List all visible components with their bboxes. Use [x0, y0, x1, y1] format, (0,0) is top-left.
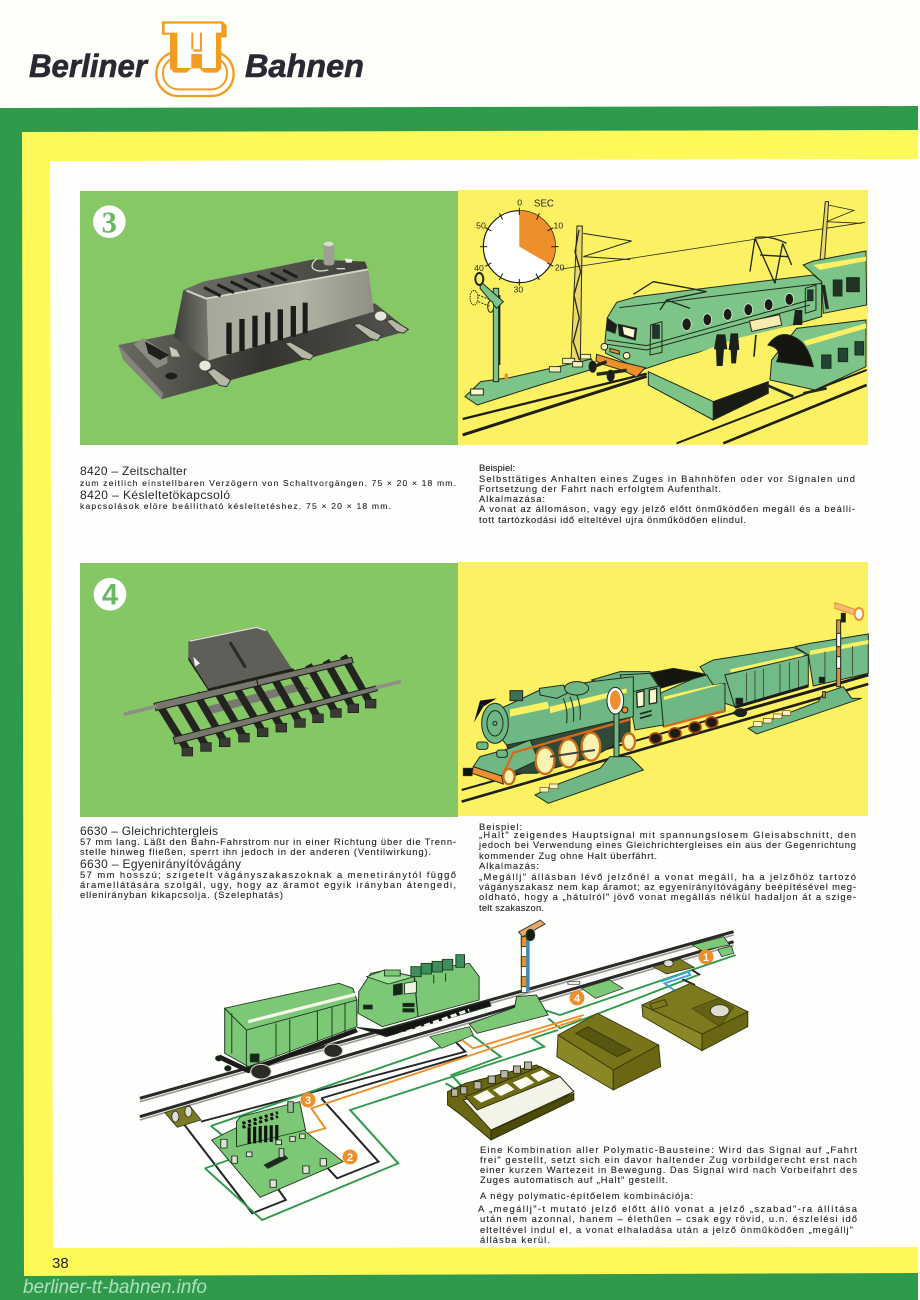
wiring [183, 955, 736, 1220]
caption: 6630 rectifier track: áramellátására szolgál, ugy, hogy az áramot egyik irányban átengedi, [80, 879, 456, 890]
text block: Polymatic combination [478, 1144, 858, 1245]
near signal with disc [535, 687, 643, 803]
text block: example 3: A vonat az állomáson, vagy egy jelző előtt önműködően megáll és a beálli- [479, 503, 855, 514]
panel: steam train illustration [458, 562, 868, 816]
caption: 6630 rectifier track: 57 mm lang. Läßt den Bahn-Fahrstrom nur in einer Richtung über die Trenn- [80, 836, 456, 847]
signal with base [465, 273, 593, 405]
text block: example 4: kommender Zug ohne Halt überfährt. [479, 850, 657, 861]
header logo [29, 21, 364, 96]
caption: 8420 time switch: 8420 – Zeitschalter [80, 464, 187, 478]
timer dial: 30 [514, 284, 523, 294]
text block: example 3: Alkalmazása: [479, 493, 545, 504]
text block: Polymatic combination: A „megállj"-t mutató jelző előtt álló vonat a jelző „szabad"-ra állítása [478, 1203, 858, 1214]
text block: example 4: vágányszakasz nem kap áramot; az egyenirányítóvágány beépítésével meg- [479, 881, 856, 892]
icon: TT emblem [156, 21, 234, 96]
text block: Polymatic combination: frei" gestellt, setzt sich ein davor haltender Zug vorbildgerecht erst nach [480, 1154, 857, 1165]
logo wordmark right: Bahnen [245, 48, 364, 84]
badges: numbered modules: 2 [347, 1152, 353, 1164]
text block: Polymatic combination: állásba kerül. [480, 1234, 550, 1245]
text block: Polymatic combination: Zuges automatisch auf „Halt" gestellt. [480, 1174, 668, 1185]
tank locomotive [357, 955, 491, 1037]
text block: example 4: „Halt" zeigendes Hauptsignal mit spannungslosem Gleisabschnitt, den [479, 829, 856, 840]
text block: Polymatic combination: Eine Kombination aller Polymatic-Bausteine: Wird das Signal auf „Fahrt [480, 1144, 857, 1155]
text block: Polymatic combination: A négy polymatic-építőelem kombinációja: [480, 1190, 693, 1201]
badges: numbered modules: 3 [305, 1095, 311, 1107]
catenary masts and wire [562, 202, 865, 362]
timer dial: SEC [534, 198, 554, 209]
right signal [748, 603, 863, 734]
pantographs [633, 237, 792, 310]
badge: number 4: 4 [102, 579, 119, 612]
text block: example 3: tott tartózkodási idő elteltével ujra önműködően elindul. [479, 514, 746, 525]
caption: 6630 rectifier track: stelle hinweg fließen, sperrt ihn jedoch in der anderen (Ventilwirkung). [80, 846, 431, 857]
timer dial: 10 [554, 220, 563, 230]
panel: product 4 green photo [80, 563, 458, 817]
text block: example 4: Beispiel: [479, 821, 522, 832]
timer dial: 40 [474, 263, 484, 273]
track contacts [165, 937, 734, 1127]
text block: example 4: telt szakaszon. [479, 902, 544, 913]
caption: 6630 rectifier track: 6630 – Egyenirányítóvágány [80, 857, 241, 871]
diagram: complete Polymatic layout [140, 920, 748, 1220]
platform [648, 325, 793, 420]
panel: electric train illustration with timer [458, 190, 868, 445]
transformer box [642, 983, 748, 1051]
timer dial: 0 [517, 198, 522, 208]
text block: example 3: Beispiel: [479, 462, 515, 473]
caption: 8420 time switch [80, 464, 456, 511]
badges: numbered modules: 1 [703, 952, 709, 964]
page number: 38 [52, 1255, 69, 1272]
track [140, 932, 734, 1120]
badges: numbered modules [300, 950, 714, 1164]
caption: 8420 time switch: zum zeitlich einstellbaren Verzögern von Schaltvorgängen. 75 × 20 × 18 mm. [80, 478, 456, 488]
text block: example 4 [478, 821, 856, 913]
memory relay box [557, 1013, 661, 1090]
text block: example 4: oldható, hogy a „hátulról" jövő vonat megállás nélkül hadaljon át a szige- [479, 891, 856, 902]
logo wordmark left: Berliner [29, 48, 149, 84]
caption: 6630 rectifier track: ellenirányban kikapcsolja. (Szelephatás) [80, 889, 283, 900]
badge: number 3 [93, 205, 126, 240]
timer dial: 50 [476, 220, 486, 230]
watermark url: berliner-tt-bahnen.info [23, 1277, 207, 1298]
text block: example 3: Fortsetzung der Fahrt nach erfolgtem Aufenthalt. [479, 483, 721, 494]
photo: rectifier track 6630 [125, 627, 399, 756]
goods wagon [216, 983, 357, 1079]
caption: 6630 rectifier track: 57 mm hosszú; szigetelt vágányszakaszoknak a menetiránytól függő [80, 869, 456, 880]
text block: example 3: Selbsttätiges Anhalten eines Zuges in Bahnhöfen oder vor Signalen und [479, 473, 855, 484]
track: left rails [463, 374, 647, 435]
track: right rails [677, 370, 867, 443]
buffers and track stop blocks [549, 354, 627, 381]
text block: example 4: jedoch bei Verwendung eines Gleichrichtergleises ein aus der Gegenrichtung [478, 839, 856, 850]
panel: product 3 green photo [80, 191, 458, 445]
goods wagons [700, 634, 868, 717]
figures and station sign [714, 310, 802, 366]
time switch unit [212, 1102, 343, 1197]
upper coach [803, 251, 867, 313]
caption: 6630 rectifier track: 6630 – Gleichrichtergleis [80, 824, 218, 838]
track [462, 675, 868, 802]
text block: example 3 [479, 462, 855, 525]
badge: number 3: 3 [102, 206, 117, 240]
caption: 6630 rectifier track [80, 824, 456, 900]
badges: numbered modules: 4 [574, 993, 581, 1005]
push-button panel [448, 1062, 574, 1140]
lower coach [767, 320, 866, 397]
caption: 8420 time switch: 8420 – Késleltetökapcsoló [80, 488, 230, 502]
signal [469, 920, 580, 1033]
photo: time switch 8420 [118, 242, 408, 399]
badge: number 4 [94, 578, 126, 612]
text block: Polymatic combination: után nem azonnal, hanem – élethűen – csak egy rövid, u.n. észlelési idő [480, 1213, 857, 1224]
text block: example 4: „Megállj" állásban lévő jelzőnél a vonat megáll, ha a jelzőhöz tartozó [479, 871, 856, 882]
text block: Polymatic combination: einer kurzen Wartezeit in Bewegung. Das Signal wird nach Vorbeifahrt des [480, 1164, 857, 1175]
steam locomotive and tender [463, 668, 725, 784]
caption: 8420 time switch: kapcsolások elöre beállitható késleltetéshez. 75 × 20 × 18 mm. [80, 501, 391, 511]
text block: example 4: Alkalmazás: [479, 860, 539, 871]
timer dial: 20 [555, 263, 565, 273]
text block: Polymatic combination: elteltével indul el, a vonat elhaladása után a jelző önműködően „megállj" [480, 1224, 853, 1235]
electric locomotive [596, 275, 822, 377]
timer dial [474, 198, 565, 294]
